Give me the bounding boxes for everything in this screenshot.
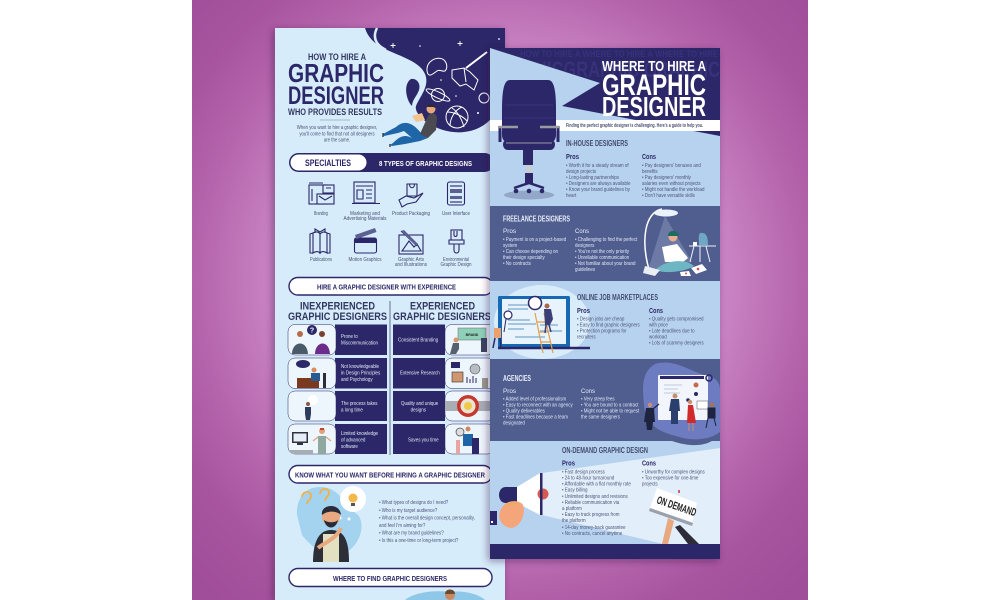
section: freelance designers: • Can choose depending on xyxy=(503,249,558,255)
row: miscommunication: ? xyxy=(310,328,314,334)
row: consistent branding: BRAND xyxy=(466,333,479,337)
icon: environmental graphic design: Graphic Design xyxy=(440,262,472,268)
specialties pill xyxy=(289,153,494,172)
icon: user interface xyxy=(442,182,470,217)
section: on-demand graphic design: Cons xyxy=(642,458,656,468)
section: freelance designers: • Payment is on a project-based xyxy=(503,237,566,243)
title: GRAPHIC xyxy=(288,58,384,88)
icon: on demand sign xyxy=(649,488,699,544)
row: takes a long time: The process takes xyxy=(341,401,378,407)
dark header banner xyxy=(490,48,720,136)
section: on-demand graphic design: the platform xyxy=(562,518,586,524)
know pill: KNOW WHAT YOU WANT BEFORE HIRING A GRAPHIC DESIGNER xyxy=(295,472,485,480)
section: on-demand graphic design: • Reliable communication via xyxy=(562,500,619,506)
title: HOW TO HIRE A xyxy=(308,52,366,62)
title: DESIGNER xyxy=(602,91,706,122)
section: on-demand graphic design: projects xyxy=(642,481,658,488)
title: WHO PROVIDES RESULTS xyxy=(288,107,382,117)
section: in-house designers: • Know your brand guidelines by xyxy=(566,187,630,193)
icon: graphic arts: Graphic Arts xyxy=(398,257,424,263)
section: on-demand graphic design xyxy=(490,441,720,544)
section: on-demand graphic design: • No contracts, cancel anytime xyxy=(562,531,622,537)
panel: left infographic page xyxy=(275,28,505,600)
specialties pill: 8 TYPES OF GRAPHIC DESIGNS xyxy=(379,161,472,168)
row: saves time xyxy=(393,424,495,454)
section: freelance designers: • Challenging to find the perfect xyxy=(575,237,638,243)
section: freelance designers: Cons xyxy=(575,228,590,235)
know pill xyxy=(289,466,492,483)
checklist questions: • Is this a one-time or long-term project? xyxy=(379,538,459,544)
section: freelance designers xyxy=(490,206,720,281)
section: on-demand graphic design: • Affordable with a flat monthly rate xyxy=(562,481,631,488)
section: in-house designers: • Might not handle the workload xyxy=(642,187,705,193)
row: not knowledgeable: Not knowledgeable xyxy=(341,364,379,370)
section: agencies: designated xyxy=(503,420,525,427)
title: DESIGNER xyxy=(288,82,384,110)
white strip xyxy=(490,120,720,131)
title xyxy=(288,52,384,117)
section: agencies: • You are bound to a contract xyxy=(581,402,639,409)
section: freelance designers: • No contracts xyxy=(503,261,531,267)
title xyxy=(602,59,706,122)
row: limited knowledge xyxy=(288,424,387,454)
section: on-demand graphic design: a platform xyxy=(562,506,582,512)
section: agencies: • Added level of professionalism xyxy=(503,396,566,403)
section: online job marketplaces: • Design jobs are cheap xyxy=(577,316,624,323)
section: in-house designers: • Long-lasting partnerships xyxy=(566,175,619,181)
section: on-demand graphic design: • 14-day money-back guarantee xyxy=(562,525,626,531)
section: in-house designers: • Worth it for a steady stream of xyxy=(566,163,629,169)
icon: user interface: User Interface xyxy=(442,211,470,217)
row: limited knowledge: of advanced xyxy=(341,437,366,444)
section: on-demand graphic design: • Fast design process xyxy=(562,469,605,476)
section: online job marketplaces: • Lots of scammy designers xyxy=(649,340,704,347)
section: in-house designers: • Designers are always available xyxy=(566,181,631,187)
icon: product packaging: Product Packaging xyxy=(392,211,430,217)
where pill xyxy=(289,568,492,586)
section: online job marketplaces: Pros xyxy=(577,306,590,315)
section: in-house designers: Cons xyxy=(642,152,656,161)
icon: marketing xyxy=(344,182,387,222)
section: agencies: • Fast deadlines because a team xyxy=(503,414,568,421)
icon: motion graphics xyxy=(348,228,382,263)
icon: publications: Publications xyxy=(310,257,332,263)
icon: motion graphics: Motion Graphics xyxy=(348,257,382,263)
row: miscommunication: Miscommunication xyxy=(341,340,378,347)
checklist questions: • What is the overall design concept, personality, xyxy=(379,515,475,522)
icon: publications xyxy=(310,229,332,263)
row: limited knowledge: software xyxy=(341,444,358,450)
hire pill: HIRE A GRAPHIC DESIGNER WITH EXPERIENCE xyxy=(317,284,456,292)
section: freelance designers: • Not familiar about your brand xyxy=(575,261,636,267)
icon: on demand sign: ON DEMAND xyxy=(655,494,698,519)
title: GRAPHIC xyxy=(602,69,706,102)
where pill: WHERE TO FIND GRAPHIC DESIGNERS xyxy=(333,576,447,583)
icon: agency team and dashboard xyxy=(643,363,720,439)
section: agencies: the same designers xyxy=(581,414,620,421)
section: agencies: • Easy to reconnect with an agency xyxy=(503,402,573,409)
comparison headings xyxy=(288,300,491,323)
illustration: man thinking with light bulb xyxy=(297,486,366,562)
dark header banner: HOW TO HIRE A WHERE TO HIRE A WHERE TO HIRE xyxy=(520,49,718,59)
icon: product packaging xyxy=(392,184,430,217)
icon: marketing: Advertising Materials xyxy=(344,216,387,222)
section: in-house designers: • Don't have versatile skills xyxy=(642,193,695,199)
icon: office chair xyxy=(499,80,559,200)
icon: marketing: Marketing and xyxy=(350,211,380,217)
purple background xyxy=(192,0,808,600)
section: freelance designers: • You're not the only priority xyxy=(575,249,630,255)
illustration: bottom cropped person xyxy=(405,590,485,600)
dark space blob with doodles xyxy=(365,28,505,132)
row: not knowledgeable: and Psychology xyxy=(341,377,373,383)
section: in-house designers: • Pay designers' monthly xyxy=(642,175,691,181)
icon: megaphone with hand xyxy=(490,473,548,528)
row: miscommunication xyxy=(288,324,387,355)
checklist questions: and feel I'm aiming for? xyxy=(379,523,426,529)
section: freelance designers: their design specialty xyxy=(503,255,545,261)
section: online job marketplaces: • Easy to find graphic designers xyxy=(577,322,640,329)
section: on-demand graphic design: • Unlimited designs and revisions xyxy=(562,494,628,500)
section: freelance designers: guidelines xyxy=(575,267,596,273)
section: freelance designers: system xyxy=(503,243,517,249)
section: online job marketplaces: • Quality gets compromised xyxy=(649,316,704,323)
row: extensive research: Extensive Research xyxy=(400,370,440,377)
section: agencies: • Might not be able to request xyxy=(581,408,640,415)
specialties pill: SPECIALTIES xyxy=(305,158,351,168)
section: in-house designers: IN-HOUSE DESIGNERS xyxy=(566,139,628,148)
section: agencies xyxy=(490,359,720,441)
row: takes a long time xyxy=(288,391,387,421)
checklist questions: • Who is my target audience? xyxy=(379,508,437,514)
section: on-demand graphic design: • Unworthy for complex designs xyxy=(642,469,705,476)
section: on-demand graphic design: ON-DEMAND GRAPHIC DESIGN xyxy=(562,446,648,455)
row: quality designs: Quality and unique xyxy=(401,401,438,407)
section: online job marketplaces: • Late deadlines due to xyxy=(649,328,695,335)
section: on-demand graphic design: Pros xyxy=(562,458,575,468)
section: in-house designers: • Pay designers' bonuses and xyxy=(642,163,701,169)
section: freelance designers: designers xyxy=(575,243,595,249)
section: on-demand graphic design: • Easy to track progress from xyxy=(562,512,619,518)
comparison headings: INEXPERIENCED xyxy=(300,300,375,312)
row: consistent branding xyxy=(393,324,495,355)
section: online job marketplaces: with price xyxy=(649,322,668,329)
comparison headings: GRAPHIC DESIGNERS xyxy=(288,311,387,323)
icon: woman working under lamp xyxy=(643,209,716,276)
subtitle: Finding the perfect graphic designer is challenging. Here's a guide to help you. xyxy=(566,123,703,129)
row: quality designs xyxy=(393,391,495,421)
checklist questions xyxy=(379,500,475,544)
section: agencies: AGENCIES xyxy=(503,374,531,383)
section: freelance designers: • Unreliable communication xyxy=(575,255,629,261)
row: not knowledgeable: in Design Principles xyxy=(341,370,381,377)
intro text xyxy=(297,125,377,144)
section: agencies: • Very steep fees xyxy=(581,396,615,403)
row: takes a long time: a long time xyxy=(341,407,363,414)
section: on-demand graphic design: • Too expensive for one-time xyxy=(642,475,699,482)
section: in-house designers: heart xyxy=(566,193,577,199)
row: not knowledgeable xyxy=(288,358,387,388)
section: in-house designers xyxy=(566,139,705,199)
section: agencies: Cons xyxy=(581,388,596,395)
panel: right infographic page xyxy=(490,48,720,559)
section: in-house designers: salaries even without projects xyxy=(642,181,701,187)
comparison headings: GRAPHIC DESIGNERS xyxy=(393,311,491,323)
dark header banner: HICGRAPHIC GRAPHIC xyxy=(535,57,720,82)
section: online job marketplaces xyxy=(490,281,720,359)
icon: graphic arts xyxy=(395,230,427,268)
section: in-house designers: benefits xyxy=(642,169,658,175)
checklist questions: • What types of designs do I need? xyxy=(379,500,448,506)
section: on-demand graphic design: • Easy billing xyxy=(562,487,588,494)
section: online job marketplaces: recruiters xyxy=(577,334,596,341)
comparison headings: EXPERIENCED xyxy=(410,300,475,312)
section: freelance designers: FREELANCE DESIGNERS xyxy=(503,214,570,224)
icon: graphic arts: and Illustrations xyxy=(395,262,427,268)
section: in-house designers: design projects xyxy=(566,169,596,175)
icon: person reading on blob xyxy=(383,104,437,147)
intro text: When you want to hire a graphic designer, xyxy=(297,125,377,131)
row: saves time: Saves you time xyxy=(408,437,439,444)
icon: branding xyxy=(309,183,334,217)
section: freelance designers: Pros xyxy=(503,228,517,235)
row: limited knowledge: Limited knowledge xyxy=(341,431,378,437)
icon: environmental graphic design: Environmental xyxy=(443,257,469,263)
hire pill xyxy=(289,278,493,295)
section: online job marketplaces: Cons xyxy=(649,306,663,315)
row: quality designs: designs xyxy=(411,407,426,414)
title: WHERE TO HIRE A xyxy=(602,59,706,75)
section: agencies: • Quality deliverables xyxy=(503,408,545,415)
row: extensive research xyxy=(393,358,495,388)
footer bar xyxy=(490,544,720,559)
checklist questions: • What are my brand guidelines? xyxy=(379,530,444,537)
section: online job marketplaces: ONLINE JOB MARKETPLACES xyxy=(577,293,658,302)
intro text: are the same. xyxy=(324,137,350,144)
icon: branding: Branding xyxy=(314,211,328,217)
row: consistent branding: Consistent Branding xyxy=(398,337,438,344)
section: online job marketplaces: • Protection programs for xyxy=(577,328,627,335)
icon: laptop with people xyxy=(493,285,590,359)
row: miscommunication: Prone to xyxy=(341,334,358,340)
intro text: you'll come to find that not all designers xyxy=(299,131,375,138)
section: online job marketplaces: workload xyxy=(649,334,667,341)
section: on-demand graphic design: • 24 to 48-hour turnaround xyxy=(562,475,614,482)
section: agencies: Pros xyxy=(503,388,517,395)
icon: environmental graphic design xyxy=(440,230,472,268)
section: in-house designers: Pros xyxy=(566,152,579,161)
